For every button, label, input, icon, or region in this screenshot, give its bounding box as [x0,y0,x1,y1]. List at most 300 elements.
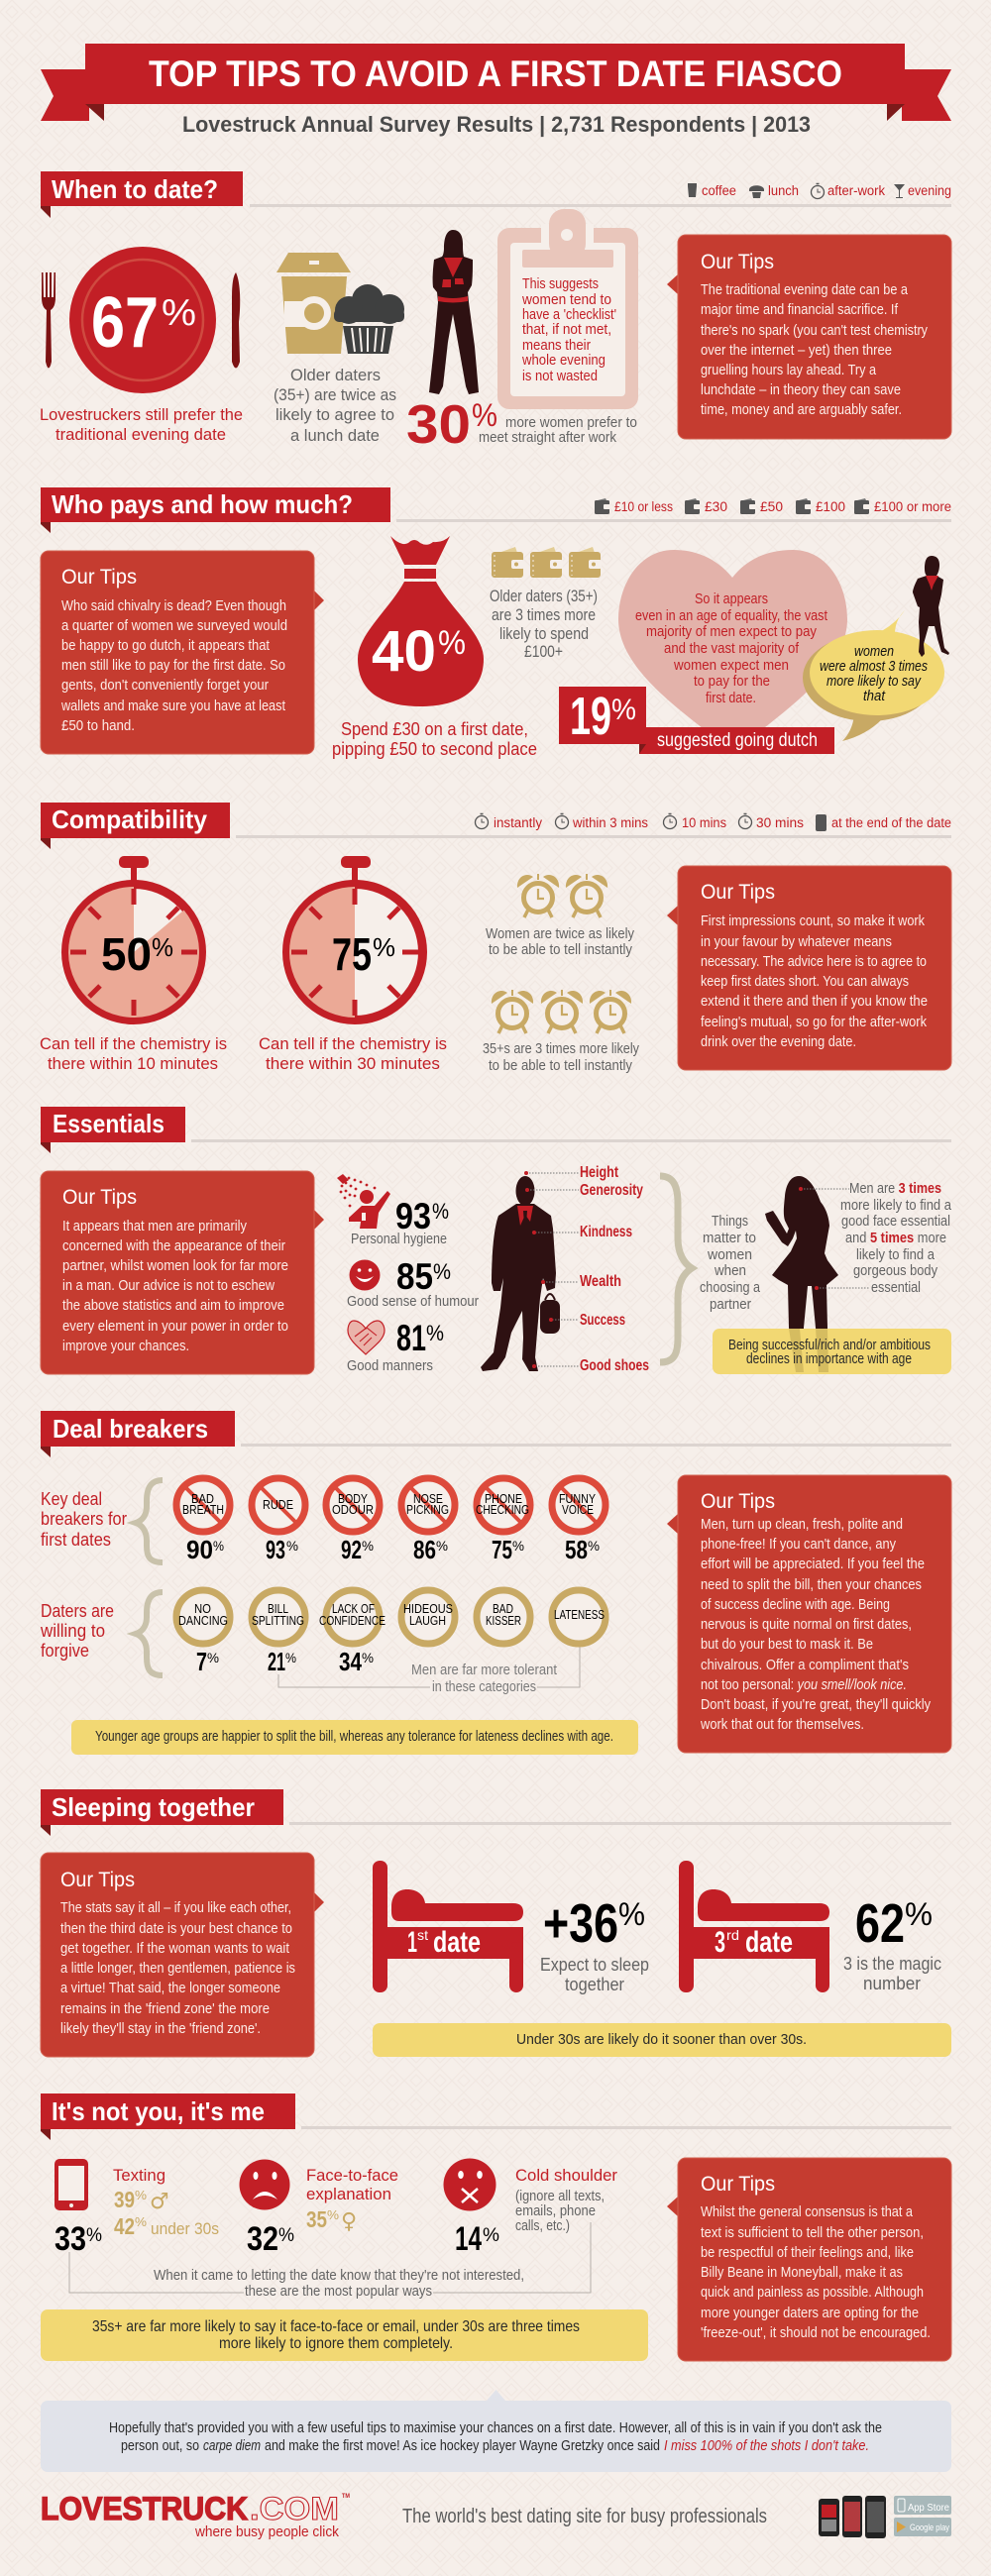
brace: men traits [660,1176,692,1362]
icons: forgivable behaviours: SPLITTING [252,1614,304,1628]
caption: 35+ instantly: 35+s are 3 times more likely [483,1040,639,1057]
label: willing to forgive: willing to [40,1621,105,1641]
caption: women instantly: Women are twice as likely [486,925,634,942]
icons: forgivable behaviours: CONFIDENCE [319,1614,385,1628]
stat: good manners [347,1318,444,1374]
caption: chemistry 10 minutes: there within 10 minutes [48,1054,218,1073]
panel: our tips evening [667,235,951,439]
panel: our tips evening: Our Tips [701,251,774,273]
method: texting: % [135,2188,147,2202]
bracket: men more tolerant [278,1647,580,1687]
panel: our tips chivalry: be happy to go dutch, it appears that [61,637,271,654]
caption: chemistry 30 minutes [259,1034,447,1073]
brace: forgive [136,1592,163,1675]
icons: prohibited behaviours: BODY [338,1492,369,1506]
stat: 62%: % [905,1896,933,1932]
heading: when to date: When to date? [52,174,218,204]
caption: popular ways: these are the most popular ways [245,2283,432,2300]
caption: things matter to women: Things [712,1213,748,1230]
icon: clipboard with text: means their [522,338,591,354]
panel: our tips appearance: the above statistics and aim to improve [62,1297,284,1314]
panel: our tips evening: there's no spark (you can't test chemistry [701,322,928,339]
closing note: and make the first move! As ice hockey player Wayne Gretzky once said [265,2437,660,2454]
badge: google play [894,2518,951,2536]
stat: good manners: 81 [396,1318,426,1358]
method: face-to-face [240,2160,398,2258]
stopwatch: 50% [65,856,202,1020]
label: willing to forgive [40,1601,114,1661]
caption: things matter to women: matter to [703,1230,756,1246]
section: compatibility [40,803,951,1074]
caption: evening date: Lovestruckers still prefer the [40,406,243,424]
icon: bed 3rd date: 3 [715,1926,725,1959]
section: when to date [40,171,951,455]
icons: forgivable behaviours: NO [194,1602,211,1616]
stat: 62%: 3 is the magic [843,1954,941,1974]
stat: 30%: more women prefer to [505,415,637,431]
icon: heart with text: to pay for the [694,673,770,690]
caption: older daters lunch [274,366,396,445]
panel: our tips turn up clean: of success decline with age. Being [701,1596,890,1613]
icon: money bag with 40%: % [438,624,466,662]
tagline: The world's best dating site for busy professionals [402,2506,767,2527]
stopwatch: 50%: 50 [101,928,152,980]
callout: yellow speech bubble: more likely to say [826,674,922,690]
stats: deal breaker percentages: % [512,1538,524,1554]
icons: prohibited behaviours: FUNNY [559,1492,597,1506]
stat: 19% going dutch: suggested going dutch [657,729,818,751]
silhouette: woman in dress with note: and 5 times more [845,1230,946,1246]
icon: bed 1st date [373,1861,523,1992]
caption: older daters spend: Older daters (35+) [490,588,598,605]
legend: time of day: evening [908,183,951,198]
method: face-to-face: % [278,2225,294,2246]
stat: 62% [843,1892,941,1993]
panel: our tips third date: remains in the 'friend zone' the more [60,2000,270,2017]
method: cold shoulder: % [483,2225,499,2246]
stopwatch: 75%: 75 [332,928,372,980]
panel: our tips evening: The traditional evening date can be a [701,281,909,298]
silhouette: woman in dress with note [765,1176,952,1372]
silhouette: woman on bubble [913,556,949,657]
method: texting: Texting [113,2166,165,2185]
heading: compatibility: Compatibility [52,805,208,834]
stat: good manners: % [426,1321,444,1345]
icon: heart with text: So it appears [695,590,768,607]
icons: prohibited behaviours: BREATH [182,1503,224,1517]
panel: our tips evening: time, money and are arguably safer. [701,401,902,418]
caption: older daters lunch: (35+) are twice as [274,385,396,404]
icon: clipboard with text: have a 'checklist' [522,307,616,323]
method: face-to-face: explanation [306,2185,391,2203]
label: key deal breakers: breakers for [41,1509,127,1529]
icons: prohibited behaviours [176,1478,606,1532]
silhouette: woman in dress with note: more likely to find a [840,1197,952,1214]
closing note: I miss 100% of the shots I don't take. [664,2437,869,2454]
logo: lovestruck: TM [342,2494,350,2500]
stat: +36% [540,1892,649,1994]
stats: deal breaker percentages: 86 [413,1535,436,1564]
panel: our tips appearance: concerned with the appearance of their [62,1237,285,1254]
caption: men more tolerant: Men are far more tolerant [411,1662,558,1678]
icons: prohibited behaviours: CHECKING [476,1503,529,1517]
stats: deal breaker percentages [186,1535,600,1564]
stat: +36%: +36 [543,1892,618,1954]
stat: personal hygiene: 93 [395,1196,431,1236]
caption: older daters lunch: Older daters [290,366,381,384]
caption: older daters lunch: likely to agree to [275,405,394,424]
legend: spend: £10 or less [614,499,673,514]
panel: our tips chivalry [41,551,324,754]
section: who pays [41,487,951,759]
heading: who pays [41,487,951,533]
heading: when to date [41,171,951,218]
panel: our tips first impressions: feeling's mutual, so go for the after-work [701,1014,927,1030]
heading: essentials [41,1107,951,1153]
icon: clipboard with text: is not wasted [522,369,598,384]
callout: younger age groups: Younger age groups are happier to split the bill, whereas any tolerance for lateness declines with age. [95,1729,613,1745]
icon: three alarm clocks [492,990,631,1033]
stat: +36%: Expect to sleep [540,1955,649,1975]
panel: our tips third date: get together. If the woman wants to wait [60,1940,290,1957]
icon: money bag with 40% [358,536,484,706]
legend: spend [595,498,951,514]
icon: bed 1st date: 1 [407,1926,417,1959]
logo: lovestruck: .COM [250,2491,339,2526]
stat: sense of humour: 85 [396,1256,433,1297]
panel: our tips turn up clean: Our Tips [701,1490,775,1513]
panel: our tips evening: gruelling hours lay ahead. Try a [701,362,877,378]
callout: yellow speech bubble [803,610,944,741]
legend: time of day: after-work [827,183,885,198]
label: willing to forgive: Daters are [41,1601,114,1621]
caption: older daters spend [490,588,598,661]
silhouette: woman in dress with note: essential [871,1279,921,1296]
silhouette: woman in dress with note: good face essential [841,1213,950,1230]
stats: forgive percentages: % [362,1650,374,1665]
panel: our tips consensus: quick and painless as possible. Although [701,2284,924,2301]
logo: lovestruck [41,2491,350,2540]
callout: under 30s [373,2023,951,2057]
icons: prohibited behaviours: RUDE [263,1498,293,1512]
icon: muffin [334,284,404,354]
silhouette: woman standing [429,230,479,394]
stats: deal breaker percentages: 93 [266,1535,285,1564]
method: texting: % [135,2214,147,2229]
panel: our tips chivalry: a quarter of women we surveyed would [61,617,287,634]
legend: spend: £50 [760,499,783,514]
caption: 35+ instantly [483,1040,639,1074]
method: texting: 42 [114,2213,135,2239]
legend: time of day: lunch [768,183,799,198]
icon: fork [42,272,55,369]
section: essentials [41,1107,952,1374]
stat: 30%: meet straight after work [479,430,617,446]
legend: spend: £100 or more [874,499,951,514]
stat: +36%: together [565,1975,624,1994]
stat: personal hygiene: % [432,1199,449,1224]
method: face-to-face: ♀ [341,2209,357,2234]
panel: our tips consensus: more younger daters are opting for the [701,2305,919,2321]
caption: things matter to women: partner [710,1296,751,1313]
stat: sense of humour: Good sense of humour [347,1293,479,1310]
heading: deal breakers [41,1411,951,1457]
stats: deal breaker percentages: % [362,1538,374,1554]
silhouette: man in suit with labels: Good shoes [580,1357,649,1374]
callout: importance with age: Being successful/rich and/or ambitious [728,1338,931,1353]
heading: who pays: Who pays and how much? [52,489,353,519]
icon: clipboard with text: whole evening [521,353,606,369]
stats: forgive percentages [196,1647,374,1676]
panel: our tips first impressions [667,866,951,1070]
method: cold shoulder [444,2158,617,2258]
icon: heart with text: women expect men [673,657,789,674]
icon: heart with text [618,550,847,753]
bracket: popular ways [69,2222,591,2293]
icon: plate with 67% [69,247,216,393]
caption: chemistry 10 minutes: Can tell if the chemistry is [40,1034,227,1053]
panel: our tips third date: a little longer, then gentlemen, patience is [60,1960,295,1977]
method: face-to-face: Face-to-face [306,2166,398,2185]
icon: bed 1st date: date [433,1926,481,1959]
stats: forgive percentages: 34 [339,1647,362,1676]
icon: coffee cup [276,253,351,354]
icons: prohibited behaviours: NOSE [413,1492,443,1506]
panel: our tips first impressions: extend it there and then if you know the [701,993,928,1010]
legend: spend: £30 [705,499,727,514]
icons: forgivable behaviours: LACK OF [332,1602,375,1616]
icon: bed 1st date: st [417,1927,428,1943]
heading: deal breakers: Deal breakers [53,1414,208,1444]
stat: 62%: 62 [855,1892,905,1954]
callout: yellow speech bubble: that [863,689,886,704]
icons: forgivable behaviours: HIDEOUS [403,1602,453,1616]
panel: our tips third date: The stats say it all – if you like each other, [60,1899,291,1916]
panel: our tips consensus: 'freeze-out', it should not be encouraged. [701,2324,931,2341]
icon: plate with 67%: 67 [91,283,159,363]
caption: spend 30: pipping £50 to second place [332,739,537,759]
panel: our tips consensus [667,2158,951,2361]
method: texting: under 30s [151,2219,219,2238]
caption: things matter to women: when [714,1262,746,1279]
stat: 62%: number [863,1974,921,1993]
panel: our tips consensus: Whilst the general consensus is that a [701,2203,914,2220]
legend: timing: instantly [494,815,542,830]
panel: our tips consensus: text is sufficient to tell the other person, [701,2224,924,2241]
icon: plate with 67%: % [162,292,196,334]
icons: prohibited behaviours: VOICE [562,1503,594,1517]
method: texting: 39 [114,2187,135,2212]
legend: timing: within 3 mins [572,815,648,830]
badge: google play: Google play [910,2522,949,2532]
icons: forgivable behaviours: LATENESS [554,1608,605,1622]
panel: our tips third date: Our Tips [60,1869,135,1891]
panel: our tips appearance [41,1171,324,1374]
badge: app store: App Store [908,2503,949,2514]
heading: it's not you: It's not you, it's me [52,2096,265,2126]
silhouette: man in suit with labels: Success [580,1312,625,1329]
panel: our tips turn up clean: Don't boast, if you're great, they'll quickly [701,1696,931,1713]
icon: clipboard with text: This suggests [522,276,599,292]
panel: our tips appearance: every element in your power in order to [62,1318,288,1335]
panel: our tips third date [41,1853,324,2057]
stats: deal breaker percentages: 90 [186,1535,213,1564]
stat: 19% going dutch: 19 [570,687,611,746]
panel: our tips appearance: Our Tips [62,1186,137,1209]
stats: deal breaker percentages: % [588,1538,600,1554]
caption: men more tolerant: in these categories [432,1678,536,1695]
subtitle: Lovestruck Annual Survey Results | 2,731 Respondents | 2013 [182,112,811,137]
icon: bed 3rd date: rd [726,1927,739,1943]
icons: forgivable behaviours: BAD [493,1602,513,1616]
method: cold shoulder: calls, etc.) [515,2217,570,2234]
legend: time of day [688,183,951,198]
panel: our tips first impressions: necessary. The advice here is to agree to [701,953,927,970]
icon: clipboard with text: that, if not met, [522,322,611,338]
silhouette: woman in dress with note: likely to find a [856,1246,936,1263]
icons: forgivable behaviours: BILL [268,1602,288,1616]
logo: lovestruck: LOVESTRUCK [41,2491,248,2526]
stat: 30%: % [472,397,497,433]
stats: forgive percentages: 7 [196,1647,207,1676]
legend: timing [476,814,951,831]
panel: our tips evening: major time and financial sacrifice. If [701,301,899,318]
silhouette: man in suit with labels [481,1164,649,1374]
icon: heart with text: first date. [706,690,756,706]
legend: time of day: coffee [702,183,736,198]
panel: our tips turn up clean: chivalrous. Offer a compliment that's [701,1657,909,1673]
closing note: carpe diem [203,2437,261,2454]
stat: +36%: % [618,1896,645,1932]
silhouette: woman in dress with note: gorgeous body [853,1262,937,1279]
panel: our tips third date: then the third date is your best chance to [60,1920,292,1937]
caption: women instantly: to be able to tell instantly [489,941,632,958]
caption: men more tolerant [411,1662,558,1695]
caption: older daters spend: are 3 times more [492,606,596,624]
panel: our tips appearance: It appears that men are primarily [62,1218,247,1234]
title: TOP TIPS TO AVOID A FIRST DATE FIASCO [149,54,842,94]
panel: our tips first impressions: keep first dates short. You can always [701,973,909,990]
stopwatch: 50%: % [152,932,173,962]
panel: our tips consensus: Our Tips [701,2173,775,2196]
panel: our tips third date: a virtue! That said, the longer someone [60,1980,280,1996]
callout: importance with age [713,1329,951,1374]
caption: things matter to women [700,1213,761,1313]
callout: 35s+: more likely to ignore them completely. [219,2335,453,2352]
callout: 35s+: 35s+ are far more likely to say it face-to-face or email, under 30s are three times [92,2318,580,2335]
panel: our tips first impressions: in your favour by whatever means [701,933,892,950]
caption: chemistry 10 minutes [40,1034,227,1073]
label: key deal breakers: Key deal [41,1489,102,1509]
icons: forgivable behaviours: DANCING [178,1614,228,1628]
stat: sense of humour: % [433,1259,451,1284]
label: key deal breakers: first dates [41,1530,111,1550]
icon: bed 3rd date: date [745,1926,793,1959]
stat: 30% [406,393,637,455]
caption: 35+ instantly: to be able to tell instantly [489,1057,632,1074]
panel: our tips turn up clean [667,1475,951,1753]
panel: our tips chivalry: men still like to pay for the first date. So [61,657,285,674]
panel: our tips chivalry: Who said chivalry is dead? Even though [61,597,286,614]
icon: heart with text: and the vast majority of [664,640,800,657]
legend: timing: 10 mins [682,815,726,830]
icon: bed 3rd date [679,1861,829,1992]
label: willing to forgive: forgive [41,1641,89,1661]
silhouette: man in suit with labels: Kindness [580,1224,632,1240]
legend: spend: £100 [816,499,845,514]
panel: our tips first impressions: First impressions count, so make it work [701,912,925,929]
panel: our tips appearance: partner, whilst women look for far more [62,1257,288,1274]
legend: timing: at the end of the date [831,815,951,830]
stats: forgive percentages: % [285,1650,296,1665]
panel: our tips chivalry: Our Tips [61,566,137,589]
callout: younger age groups [71,1720,638,1755]
section: it's not you [41,2093,951,2361]
method: texting: ♂ [150,2190,169,2214]
stats: deal breaker percentages: 92 [341,1535,362,1564]
stopwatch: 75%: % [373,932,395,962]
stat: 30%: 30 [406,393,471,455]
callout: under 30s: Under 30s are likely do it sooner than over 30s. [516,2031,807,2048]
stat: personal hygiene [337,1174,449,1247]
heading: essentials: Essentials [53,1109,165,1138]
heading: it's not you [41,2093,951,2140]
method: cold shoulder: (ignore all texts, [515,2188,605,2204]
icons: prohibited behaviours: ODOUR [332,1503,374,1517]
icons: forgivable behaviours: LAUGH [409,1614,446,1628]
panel: our tips first impressions: drink over the evening date. [701,1033,856,1050]
stat: sense of humour [347,1256,479,1310]
callout: yellow speech bubble: women [854,644,894,660]
badge: app store [894,2496,951,2515]
method: cold shoulder: 14 [455,2220,482,2258]
section: deal breakers [40,1411,951,1755]
closing note: person out, so [121,2437,199,2454]
panel: our tips appearance: improve your chances. [62,1338,189,1354]
stats: deal breaker percentages: % [436,1538,448,1554]
method: face-to-face: 32 [247,2220,278,2258]
panel: our tips consensus: be respectful of their feelings and, like [701,2244,914,2261]
stats: deal breaker percentages: 75 [492,1535,512,1564]
panel: our tips chivalry: £50 to hand. [61,717,135,734]
panel: our tips turn up clean: nervous is quite normal on first dates, [701,1616,912,1633]
silhouette: man in suit with labels: Height [580,1164,618,1181]
caption: popular ways [154,2267,524,2300]
caption: women instantly [486,925,634,958]
method: texting: % [86,2225,102,2246]
panel: our tips appearance: in a man. Our advice is not to eschew [62,1277,275,1294]
logo: lovestruck: where busy people click [194,2523,339,2540]
caption: older daters lunch: a lunch date [290,426,380,445]
stats: forgive percentages: 21 [268,1647,285,1676]
heading: sleeping together [41,1789,951,1836]
callout: 35s+ [41,2309,648,2361]
silhouette: man in suit with labels: Generosity [580,1182,643,1199]
method: face-to-face: % [327,2207,339,2222]
icon: clipboard with text [497,209,638,409]
closing note [41,2390,951,2472]
stat: 19% going dutch [559,687,834,754]
legend: timing: 30 mins [756,815,804,830]
caption: spend 30: Spend £30 on a first date, [341,719,528,739]
caption: older daters spend: £100+ [524,643,563,661]
method: face-to-face: 35 [306,2206,327,2232]
method: texting [55,2159,219,2258]
stats: deal breaker percentages: % [213,1538,224,1554]
panel: our tips third date: likely they'll stay in the 'friend zone'. [60,2020,261,2037]
method: texting: 33 [55,2220,86,2258]
silhouette: woman in dress with note: Men are 3 times [849,1180,941,1197]
